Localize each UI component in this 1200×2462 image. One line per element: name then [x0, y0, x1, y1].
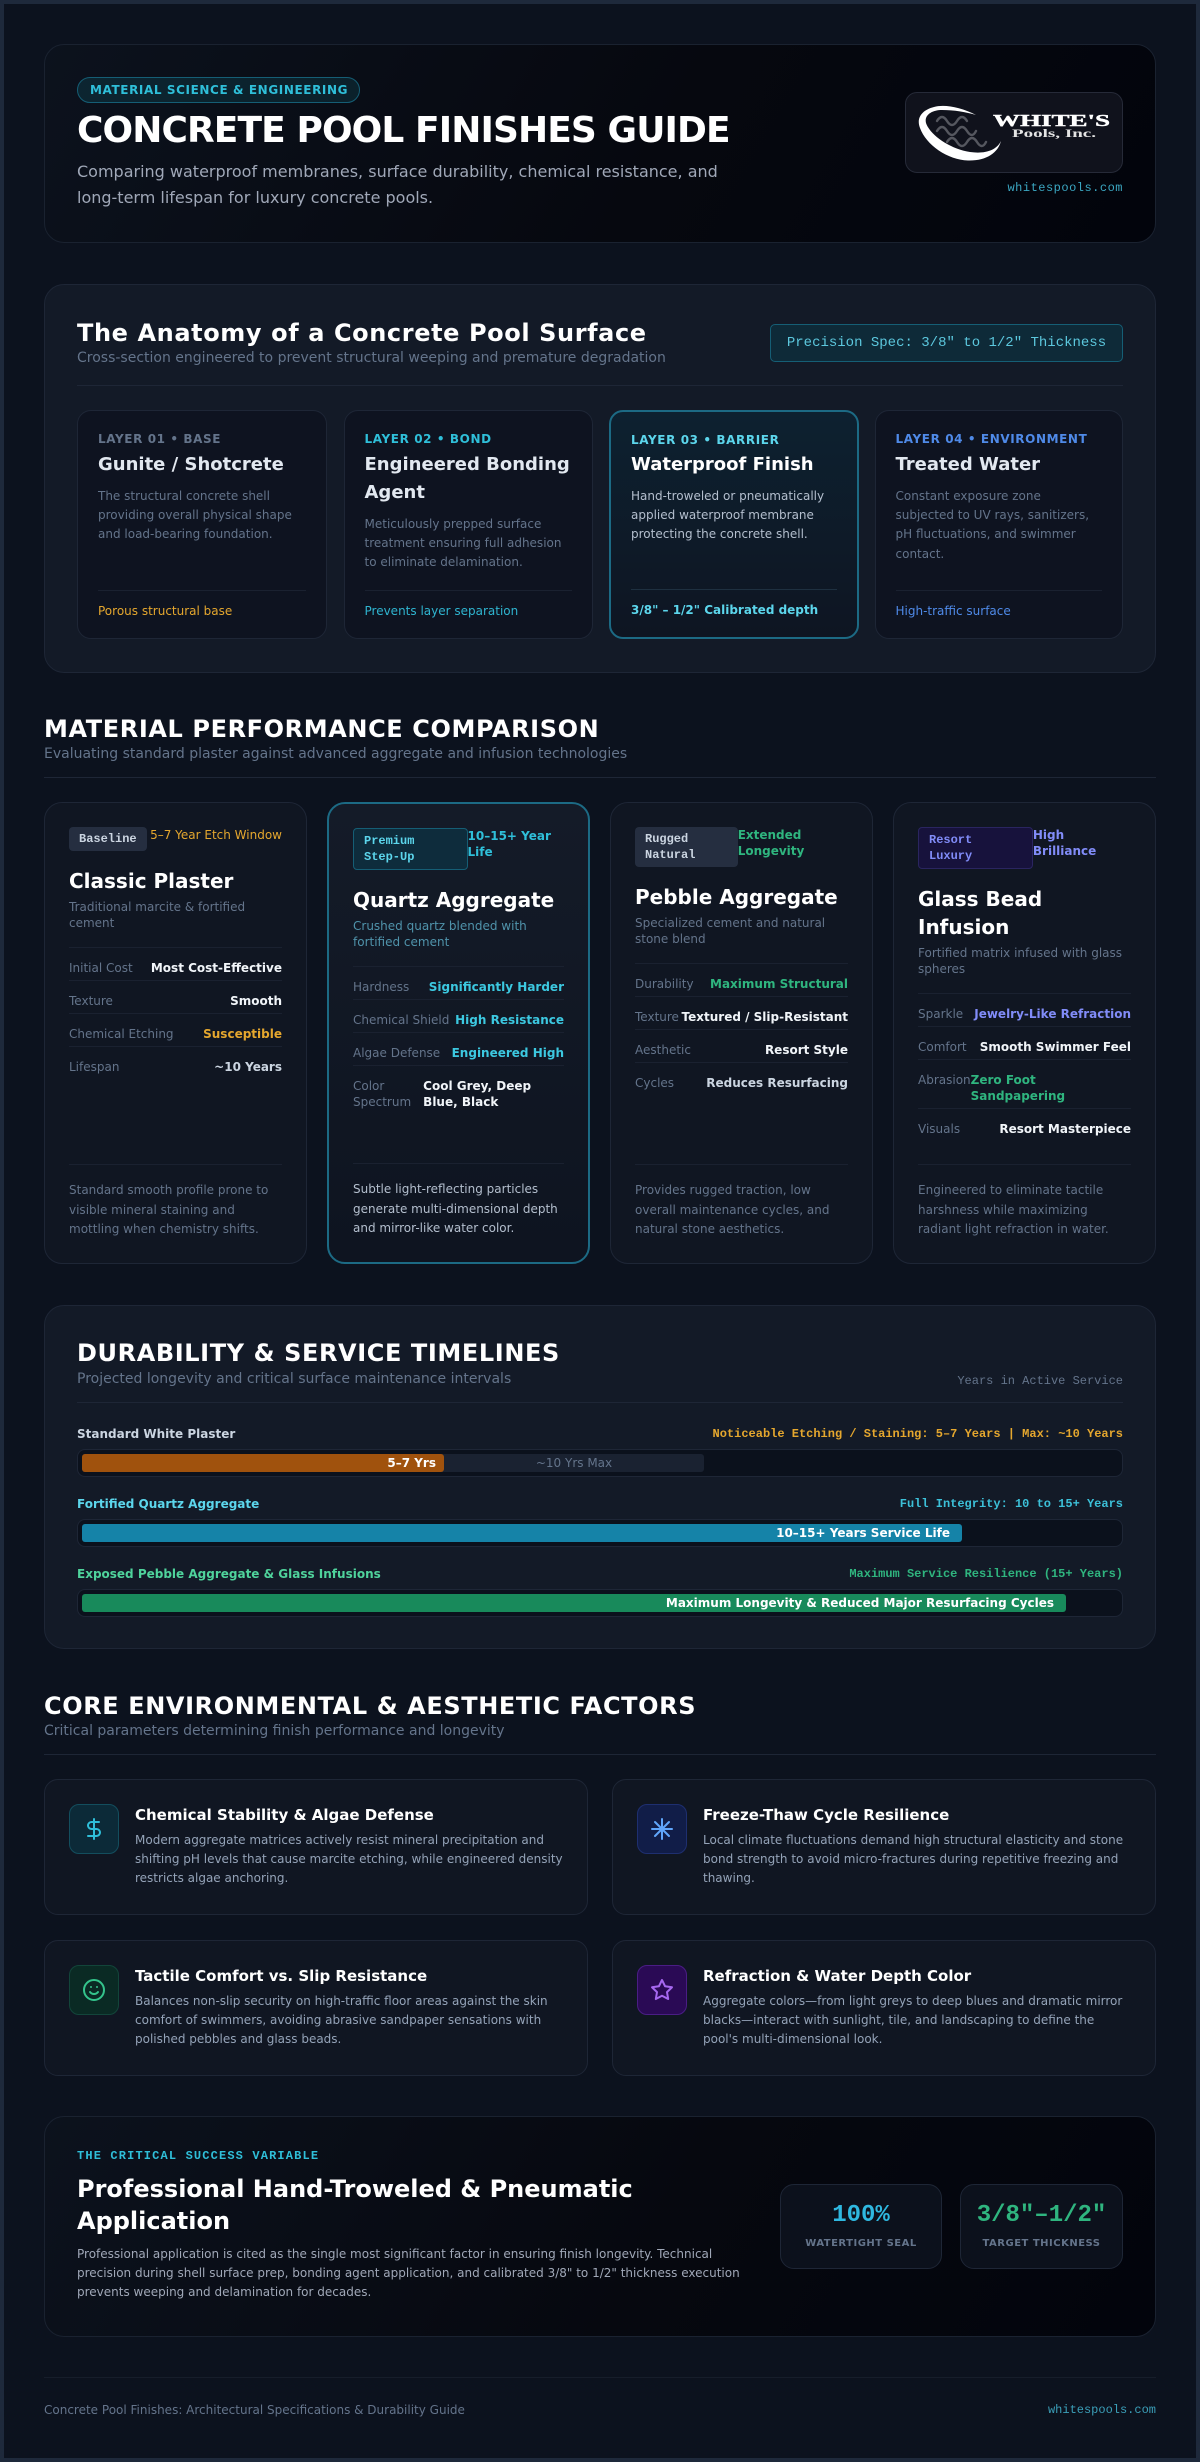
- material card: classic plaster: ~10 Years: [214, 1060, 282, 1074]
- layer card: gunite: [77, 410, 326, 639]
- layer card: treated water: Constant exposure zone subjected to UV rays, sanitizers, pH fluctuations, and swimmer contact.: [896, 489, 1089, 561]
- panel: durability timelines: [44, 1305, 1156, 1649]
- material card: pebble aggregate: Pebble Aggregate: [635, 885, 838, 909]
- material card: classic plaster: Smooth: [230, 994, 282, 1008]
- material card: glass bead infusion: [893, 802, 1156, 1264]
- layer card: bonding agent: [344, 410, 593, 639]
- material card: pebble aggregate: Aesthetic: [635, 1043, 691, 1057]
- axis caption: Years in Active Service: [957, 1374, 1123, 1388]
- material card: glass bead infusion: Sparkle: [918, 1007, 963, 1021]
- layer card: waterproof finish: LAYER 03 • BARRIER: [631, 433, 779, 447]
- callout body: prevents weeping and delamination for decades.: [77, 2285, 371, 2299]
- material card: quartz aggregate: Algae Defense: [353, 1046, 440, 1060]
- material card: pebble aggregate: Textured / Slip-Resistant: [682, 1010, 848, 1024]
- precision spec callout: [770, 324, 1123, 362]
- subtitle: [77, 162, 718, 207]
- footer link: whitespools.com: [1048, 2403, 1156, 2417]
- material card: classic plaster: Chemical Etching: [69, 1027, 174, 1041]
- factor card: refraction: [612, 1940, 1156, 2076]
- material card: classic plaster: [44, 802, 307, 1264]
- layer card: gunite: The structural concrete shell providing overall physical shape and load-bearing foundation.: [98, 489, 292, 541]
- logo: Pools, Inc.: [1012, 126, 1096, 140]
- material card: quartz aggregate: Hardness: [353, 980, 409, 994]
- layer card: gunite: Gunite / Shotcrete: [98, 454, 284, 475]
- material card: quartz aggregate: Color Spectrum: [353, 1079, 411, 1109]
- material card: pebble aggregate: Rugged Natural: [645, 832, 695, 862]
- icon: snowflake: [637, 1804, 687, 1854]
- anatomy heading: The Anatomy of a Concrete Pool Surface: [77, 319, 647, 347]
- material card: pebble aggregate: [610, 802, 873, 1264]
- material card: classic plaster: Lifespan: [69, 1060, 119, 1074]
- material subtitle: Evaluating standard plaster against advanced aggregate and infusion technologies: [44, 746, 627, 762]
- material card: glass bead infusion: Smooth Swimmer Feel: [980, 1040, 1131, 1054]
- layer card: bonding agent: Prevents layer separation: [364, 604, 518, 618]
- material card: glass bead infusion: High Brilliance: [1033, 828, 1096, 858]
- timeline label: plaster: Standard White Plaster: [77, 1427, 235, 1441]
- material card: glass bead infusion: Visuals: [918, 1122, 960, 1136]
- factors subtitle: Critical parameters determining finish performance and longevity: [44, 1723, 505, 1739]
- material card: glass bead infusion: Abrasion: [918, 1073, 971, 1087]
- layer card: gunite: Porous structural base: [98, 604, 232, 618]
- material card: quartz aggregate: 10–15+ Year Life: [468, 829, 551, 859]
- layer card: waterproof finish: Hand-troweled or pneumatically applied waterproof membrane protecting the concrete shell.: [631, 489, 824, 541]
- layer card: gunite: LAYER 01 • BASE: [98, 432, 221, 446]
- stat: watertight seal: 100%: [832, 2202, 890, 2229]
- material card: glass bead infusion: Resort Luxury: [929, 833, 972, 863]
- heading: material comparison: MATERIAL PERFORMANCE COMPARISON: [44, 715, 599, 743]
- stat: target thickness: [960, 2184, 1123, 2269]
- category tag: [77, 77, 360, 103]
- website link: whitespools.com: [1007, 181, 1123, 195]
- material card: quartz aggregate: Premium Step-Up: [364, 834, 414, 864]
- material card: quartz aggregate: Engineered High: [452, 1046, 564, 1060]
- timeline bar: plaster: ~10 Yrs Max: [536, 1456, 612, 1470]
- layer card: treated water: [874, 410, 1123, 639]
- factor card: refraction: Aggregate colors—from light greys to deep blues and dramatic mirror blacks—interact with sunlight, tile, and landscaping to define the pool's multi-dimensional look.: [703, 1994, 1122, 2046]
- material card: classic plaster: Traditional marcite & fortified cement: [69, 900, 245, 930]
- anatomy subtitle: Cross-section engineered to prevent structural weeping and premature degradation: [77, 350, 666, 366]
- material card: classic plaster: Susceptible: [203, 1027, 282, 1041]
- timeline label: quartz: Fortified Quartz Aggregate: [77, 1497, 259, 1511]
- material card: quartz aggregate: Subtle light-reflecting particles generate multi-dimensional depth and mirror-like water color.: [353, 1182, 558, 1235]
- precision spec callout: Precision Spec: 3/8" to 1/2" Thickness: [787, 335, 1106, 351]
- callout body: precision during shell surface prep, bonding agent application, and calibrated 3/8" to 1/2" thickness execution: [77, 2266, 740, 2280]
- callout label: THE CRITICAL SUCCESS VARIABLE: [77, 2149, 319, 2163]
- timeline bar: quartz: 10–15+ Years Service Life: [776, 1526, 950, 1540]
- material card: classic plaster: Initial Cost: [69, 961, 133, 975]
- timeline value: pebble and glass: Maximum Service Resilience (15+ Years): [849, 1567, 1123, 1581]
- timeline bar: pebble and glass: Maximum Longevity & Reduced Major Resurfacing Cycles: [666, 1596, 1054, 1610]
- material card: pebble aggregate: Cycles: [635, 1076, 674, 1090]
- durability subtitle: Projected longevity and critical surface maintenance intervals: [77, 1371, 511, 1387]
- timeline value: plaster: Noticeable Etching / Staining: 5–7 Years | Max: ~10 Years: [713, 1427, 1123, 1441]
- subtitle: long-term lifespan for luxury concrete pools.: [77, 188, 433, 207]
- material card: classic plaster: Most Cost-Effective: [151, 961, 282, 975]
- callout body: [77, 2247, 740, 2299]
- material card: pebble aggregate: Texture: [635, 1010, 679, 1024]
- panel: critical success variable: [44, 2116, 1156, 2337]
- material card: quartz aggregate: Significantly Harder: [429, 980, 564, 994]
- timeline bar: quartz: [77, 1519, 1123, 1547]
- layer card: treated water: Treated Water: [896, 454, 1040, 475]
- logo: WHITE'S: [993, 111, 1110, 130]
- layer card: bonding agent: LAYER 02 • BOND: [364, 432, 492, 446]
- factor card: tactile comfort: [44, 1940, 588, 2076]
- header panel: [44, 44, 1156, 243]
- material card: quartz aggregate: High Resistance: [455, 1013, 564, 1027]
- logo: [905, 92, 1123, 173]
- material card: quartz aggregate: [327, 802, 590, 1264]
- material card: glass bead infusion: Resort Masterpiece: [999, 1122, 1131, 1136]
- material card: quartz aggregate: Crushed quartz blended with fortified cement: [353, 919, 527, 949]
- material card: classic plaster: 5–7 Year Etch Window: [150, 828, 282, 842]
- timeline bar: pebble and glass: [77, 1589, 1123, 1617]
- factor card: tactile comfort: Balances non-slip security on high-traffic floor areas against the skin comfort of swimmers, avoiding abrasive sandpaper sensations with polished pebbles and glass beads.: [135, 1994, 548, 2046]
- icon: star: [637, 1965, 687, 2015]
- factor card: chemical stability: Modern aggregate matrices actively resist mineral precipitation and shifting pH levels that cause marcite etching, while engineered density restricts algae anchoring.: [135, 1833, 563, 1885]
- material card: glass bead infusion: Comfort: [918, 1040, 967, 1054]
- factor card: chemical stability: Chemical Stability & Algae Defense: [135, 1806, 434, 1824]
- layer card: treated water: High-traffic surface: [896, 604, 1011, 618]
- material card: pebble aggregate: Reduces Resurfacing: [706, 1076, 848, 1090]
- material card: classic plaster: Baseline: [79, 832, 137, 846]
- material card: glass bead infusion: Zero Foot Sandpapering: [971, 1073, 1065, 1103]
- material card: glass bead infusion: Jewelry-Like Refraction: [974, 1007, 1131, 1021]
- material card: pebble aggregate: Specialized cement and natural stone blend: [635, 916, 825, 946]
- factor card: freeze-thaw: Local climate fluctuations demand high structural elasticity and stone bond strength to avoid micro-fractures during repetitive freezing and thawing.: [703, 1833, 1123, 1885]
- material card: quartz aggregate: Quartz Aggregate: [353, 888, 554, 912]
- timeline value: quartz: Full Integrity: 10 to 15+ Years: [900, 1497, 1123, 1511]
- material card: quartz aggregate: Chemical Shield: [353, 1013, 449, 1027]
- stat: target thickness: 3/8"–1/2": [977, 2202, 1106, 2229]
- durability heading: DURABILITY & SERVICE TIMELINES: [77, 1339, 560, 1367]
- layer card: bonding agent: Meticulously prepped surface treatment ensuring full adhesion to eliminate delamination.: [364, 517, 561, 569]
- subtitle: Comparing waterproof membranes, surface durability, chemical resistance, and: [77, 162, 718, 181]
- title: CONCRETE POOL FINISHES GUIDE: [77, 110, 730, 151]
- icon: smile: [69, 1965, 119, 2015]
- callout heading: Professional Hand-Troweled & Pneumatic: [77, 2175, 633, 2203]
- layer card: waterproof finish: Waterproof Finish: [631, 454, 814, 475]
- category tag: MATERIAL SCIENCE & ENGINEERING: [90, 83, 348, 97]
- material card: classic plaster: Standard smooth profile prone to visible mineral staining and mottling when chemistry shifts.: [69, 1183, 268, 1236]
- callout heading: [77, 2175, 633, 2235]
- layer card: bonding agent: Engineered Bonding Agent: [364, 454, 570, 503]
- factor card: tactile comfort: Tactile Comfort vs. Slip Resistance: [135, 1967, 427, 1985]
- factor card: freeze-thaw: [612, 1779, 1156, 1915]
- material card: pebble aggregate: Provides rugged traction, low overall maintenance cycles, and natural stone aesthetics.: [635, 1183, 830, 1236]
- heading: core factors: CORE ENVIRONMENTAL & AESTHETIC FACTORS: [44, 1692, 696, 1720]
- factor card: freeze-thaw: Freeze-Thaw Cycle Resilience: [703, 1806, 949, 1824]
- material card: pebble aggregate: Maximum Structural: [710, 977, 848, 991]
- footer text: Concrete Pool Finishes: Architectural Specifications & Durability Guide: [44, 2403, 465, 2417]
- material card: quartz aggregate: Cool Grey, Deep Blue, Black: [423, 1079, 531, 1109]
- icon: dollar: [69, 1804, 119, 1854]
- material card: glass bead infusion: Engineered to eliminate tactile harshness while maximizing radiant light refraction in water.: [918, 1183, 1109, 1236]
- layer card: waterproof finish: 3/8" – 1/2" Calibrated depth: [631, 603, 818, 617]
- timeline label: pebble and glass: Exposed Pebble Aggregate & Glass Infusions: [77, 1567, 381, 1581]
- material card: glass bead infusion: Fortified matrix infused with glass spheres: [918, 946, 1122, 976]
- callout body: Professional application is cited as the single most significant factor in ensuring finish longevity. Technical: [77, 2247, 712, 2261]
- material card: pebble aggregate: Resort Style: [765, 1043, 848, 1057]
- material card: pebble aggregate: Durability: [635, 977, 694, 991]
- factor card: chemical stability: [44, 1779, 588, 1915]
- layer card: treated water: LAYER 04 • ENVIRONMENT: [896, 432, 1087, 446]
- material card: glass bead infusion: Glass Bead Infusion: [918, 887, 1042, 939]
- panel: anatomy: [44, 284, 1156, 673]
- layer card: waterproof finish: [609, 410, 858, 639]
- material card: classic plaster: Classic Plaster: [69, 869, 233, 893]
- material card: pebble aggregate: Extended Longevity: [738, 828, 804, 858]
- timeline bar: plaster: 5–7 Yrs: [387, 1456, 436, 1470]
- timeline bar: plaster: [77, 1449, 1123, 1477]
- material card: classic plaster: Texture: [69, 994, 113, 1008]
- factor card: refraction: Refraction & Water Depth Color: [703, 1967, 971, 1985]
- stat: target thickness: TARGET THICKNESS: [982, 2238, 1100, 2249]
- stat: watertight seal: WATERTIGHT SEAL: [805, 2238, 917, 2249]
- callout heading: Application: [77, 2207, 230, 2235]
- stat: watertight seal: [780, 2184, 942, 2269]
